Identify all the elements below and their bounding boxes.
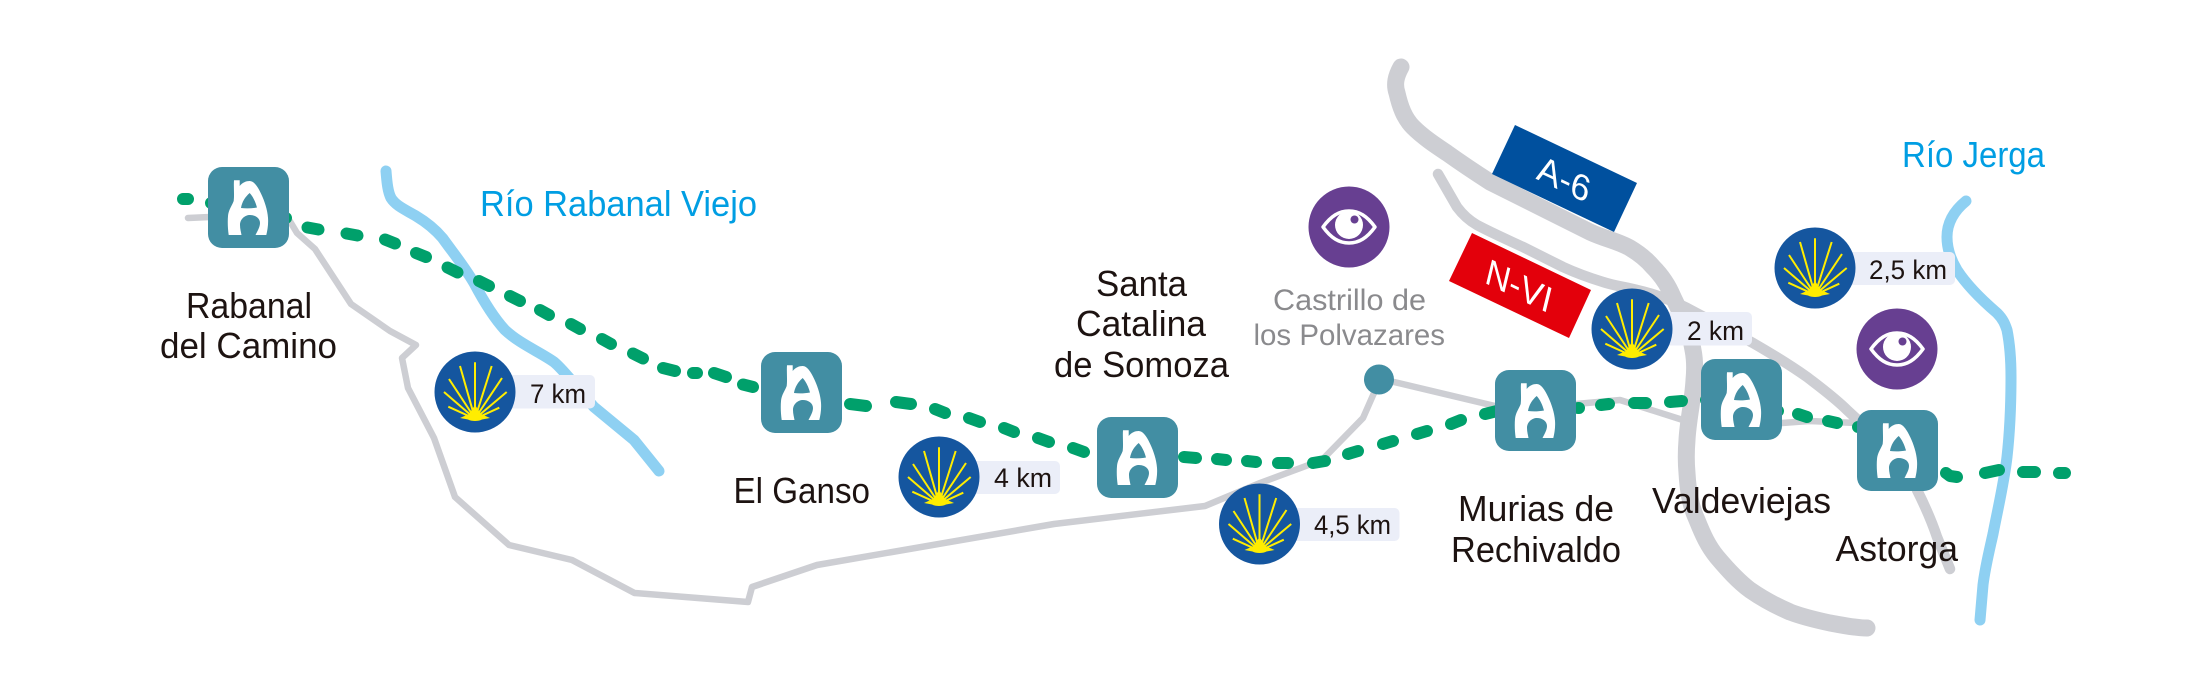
label: Santa Catalina de Somoza: Santa	[1096, 263, 1188, 304]
distance: 4,5 km	[1219, 484, 1400, 564]
distance: 4 km: 4 km	[994, 463, 1052, 493]
label: El Ganso: El Ganso	[734, 470, 870, 511]
icon: hostel Astorga	[1857, 410, 1938, 491]
icon: hostel Rabanal del Camino	[208, 167, 289, 248]
distance: 7 km: 7 km	[530, 379, 586, 409]
label: Castrillo de los Polvazares: Castrillo de	[1273, 284, 1426, 317]
distance: 2,5 km: 2,5 km	[1869, 255, 1947, 285]
label: Rabanal del Camino	[160, 285, 337, 366]
road: A-6 motorway	[1396, 67, 1867, 628]
icon: hostel Murias de Rechivaldo	[1495, 370, 1576, 451]
label: Santa Catalina de Somoza	[1054, 263, 1230, 385]
distance: 2,5 km	[1774, 228, 1955, 308]
label: Astorga: Astorga	[1836, 528, 1959, 569]
river: Río Jerga	[1947, 201, 2011, 620]
label: Murias de Rechivaldo: Murias de	[1458, 488, 1614, 529]
label: Santa Catalina de Somoza: de Somoza	[1054, 344, 1230, 385]
route: green dashed Camino	[183, 199, 2065, 477]
road: N-VI	[1438, 174, 1950, 569]
icon: hostel Valdeviejas	[1701, 359, 1782, 440]
distance: 2 km	[1592, 288, 1752, 370]
icon: viewpoint eye Astorga	[1856, 308, 1938, 390]
icon: viewpoint eye Castrillo	[1308, 186, 1390, 268]
label: Castrillo de los Polvazares	[1254, 284, 1445, 352]
distance: 2 km: 2 km	[1687, 316, 1744, 346]
label: Castrillo de los Polvazares: los Polvazares	[1254, 319, 1445, 352]
label: Valdeviejas: Valdeviejas	[1652, 480, 1831, 521]
river: Río Rabanal Viejo	[386, 171, 659, 471]
distance: 4 km	[898, 436, 1060, 518]
label: Río Jerga: Río Jerga	[1902, 134, 2046, 175]
sign: A-6	[1492, 125, 1637, 232]
icon: hostel El Ganso	[761, 352, 842, 433]
distance: 7 km	[434, 352, 595, 432]
sign: N-VI: N-VI	[1482, 252, 1556, 321]
label: Murias de Rechivaldo	[1451, 488, 1621, 570]
label: Santa Catalina de Somoza: Catalina	[1076, 303, 1207, 344]
label: Río Rabanal Viejo: Río Rabanal Viejo	[480, 183, 757, 224]
icon: hostel Santa Catalina de Somoza	[1097, 417, 1178, 498]
marker: Castrillo de los Polvazares	[1364, 364, 1394, 394]
distance: 4,5 km: 4,5 km	[1314, 510, 1391, 540]
sign: N-VI	[1449, 233, 1591, 338]
label: Murias de Rechivaldo: Rechivaldo	[1451, 529, 1621, 570]
road: local road network	[188, 217, 1857, 602]
sign: A-6: A-6	[1534, 148, 1594, 211]
label: Rabanal del Camino: Rabanal	[186, 285, 312, 326]
label: Rabanal del Camino: del Camino	[160, 325, 337, 366]
